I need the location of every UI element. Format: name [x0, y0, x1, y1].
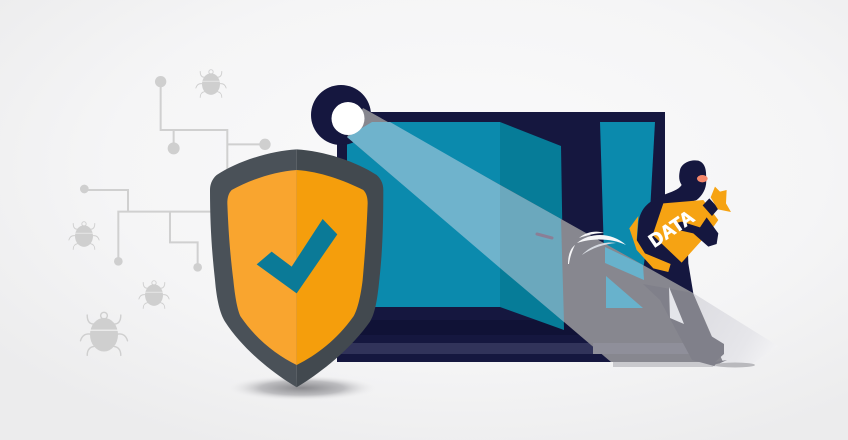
lit laptop base band	[593, 343, 703, 354]
shield border left	[210, 149, 297, 387]
shield	[210, 149, 383, 387]
laptop frame	[337, 112, 665, 362]
gap between legs	[669, 287, 684, 324]
laptop base stripes	[337, 320, 627, 335]
icon: bug left	[69, 222, 99, 249]
lit door	[500, 185, 564, 322]
door swoosh marks	[568, 232, 626, 264]
lit left wall	[347, 122, 500, 268]
check mark	[257, 219, 337, 293]
pale band below laptop	[613, 362, 713, 367]
laptop	[337, 112, 665, 362]
circuit lines, upper	[155, 76, 271, 170]
open door	[500, 122, 564, 330]
bag label: DATA	[645, 207, 699, 252]
icon: bug large	[80, 312, 128, 355]
bag back	[629, 216, 671, 272]
bag front	[653, 200, 718, 263]
mask opening	[697, 175, 708, 182]
shield face left	[227, 170, 297, 365]
lit right panel band	[605, 247, 644, 280]
shield border right	[297, 149, 383, 387]
light beam	[347, 108, 723, 367]
foot shadow	[715, 362, 755, 368]
shield shadow	[226, 375, 378, 401]
thief arm	[675, 217, 718, 247]
camera ring	[311, 85, 371, 160]
bag tie	[703, 198, 719, 216]
lit right panel triangle	[606, 276, 643, 308]
icon: bug top	[196, 70, 226, 97]
right screen panel	[600, 122, 655, 320]
door handle in light	[537, 234, 552, 238]
screen left wall	[347, 122, 500, 307]
thief leg	[643, 284, 755, 368]
thief upper body and bag	[629, 160, 731, 293]
pale floor shadow	[613, 293, 778, 367]
circuit lines, lower	[80, 185, 213, 272]
thief head and torso	[637, 160, 706, 293]
door handle	[537, 234, 552, 238]
lens	[332, 102, 364, 135]
beam shadow over dark areas	[347, 108, 723, 362]
shield face right	[297, 170, 368, 365]
bag knot star	[711, 187, 731, 212]
icon: bug middle	[139, 281, 169, 308]
